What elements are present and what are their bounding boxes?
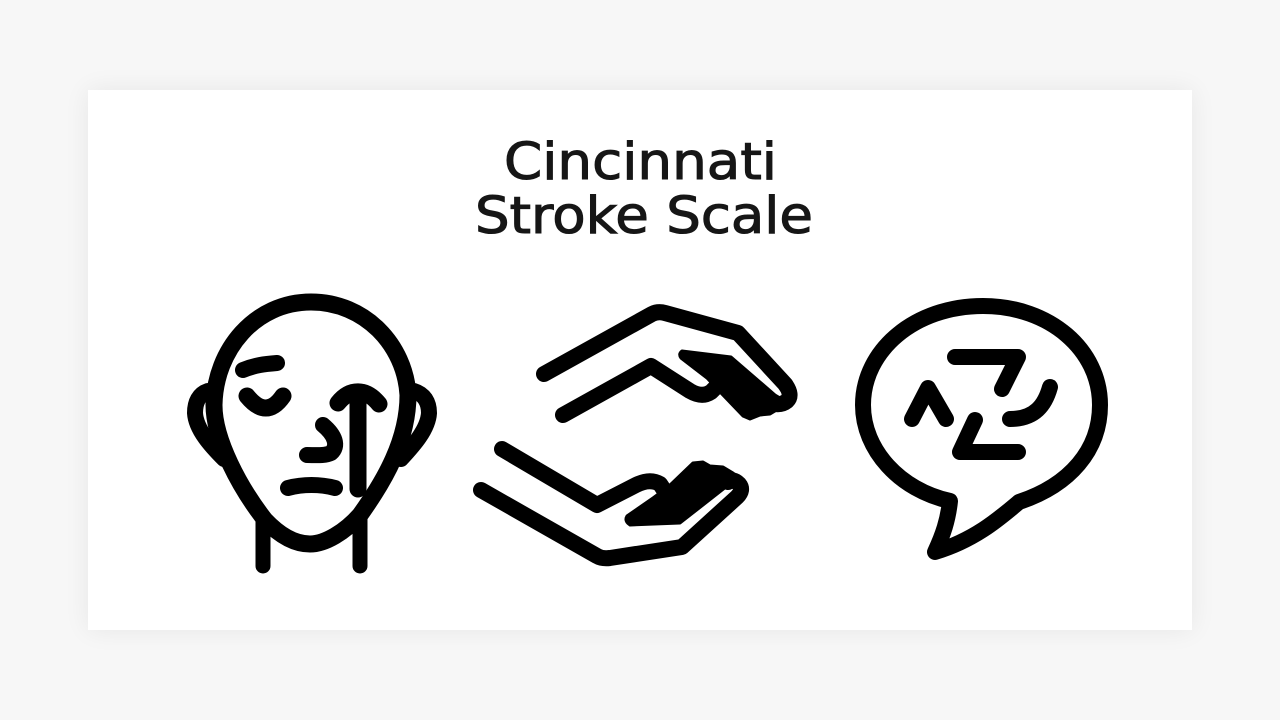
hand: lower outline — [481, 480, 741, 558]
bubble outline — [863, 306, 1100, 552]
face: upward arrow — [338, 392, 379, 489]
letter shape: L — [960, 420, 1018, 452]
face: head outline — [214, 302, 408, 544]
title — [475, 133, 813, 246]
hand: upper fingers — [680, 351, 790, 419]
panel: white card — [88, 90, 1192, 630]
icon: speech bubble with letters — [863, 306, 1100, 552]
letter shape: Z top — [955, 357, 1018, 389]
face: nose — [307, 425, 335, 455]
title: Stroke Scale — [475, 187, 813, 246]
letter shape: J — [1010, 387, 1050, 419]
title: Cincinnati — [504, 133, 777, 192]
icon: drooping face with raised arrow — [195, 302, 429, 566]
letter shape: A — [912, 388, 946, 419]
face: eyebrow — [243, 363, 277, 370]
face: closed eye — [247, 396, 283, 408]
hand: upper inner line — [563, 366, 716, 415]
face: mouth — [288, 485, 335, 488]
face: neck — [263, 518, 360, 566]
face: left ear — [195, 391, 224, 459]
hand: lower fingers — [626, 462, 739, 525]
hand: upper outline — [544, 312, 790, 404]
icon: two hands, arm strength test — [481, 312, 790, 558]
face: right ear — [401, 391, 429, 459]
hand: lower inner line — [502, 449, 664, 505]
